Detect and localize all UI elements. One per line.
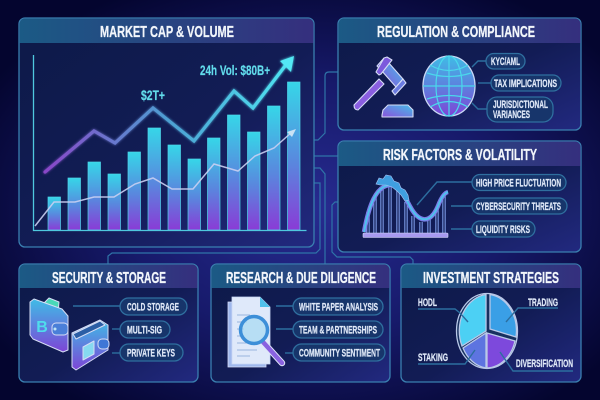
heading: security: SECURITY & STORAGE: [52, 270, 166, 287]
callout: team and partnerships: TEAM & PARTNERSHIPS: [299, 324, 377, 336]
callout: white paper analysis: [276, 298, 383, 315]
pie chart: [456, 294, 518, 368]
circuit connector lines: [108, 72, 413, 264]
callout: cold storage: [73, 298, 187, 315]
icon: bitcoin wallet: [30, 298, 68, 352]
bar chart: [48, 82, 300, 230]
panel: market cap and volume: [19, 18, 314, 247]
callout: tax implications: TAX IMPLICATIONS: [494, 78, 557, 90]
callout: liquidity risks: [451, 221, 535, 237]
label: 24h volume: 24h Vol: $80B+: [200, 62, 270, 78]
callout: liquidity risks: LIQUIDITY RISKS: [476, 224, 530, 236]
label: staking: STAKING: [418, 352, 448, 364]
heading: research: RESEARCH & DUE DILIGENCE: [226, 270, 376, 287]
chart axes: [34, 55, 306, 230]
callout: high price fluctuation: [417, 174, 566, 205]
panel: risk factors and volatility: [338, 141, 581, 252]
callout: KYC/AML: KYC/AML: [491, 56, 520, 68]
callout: jurisdictional variances: [472, 97, 553, 122]
callout: private keys: PRIVATE KEYS: [127, 348, 175, 360]
icon: document with magnifier: [228, 297, 282, 367]
callout: multi-sig: [112, 321, 170, 338]
panel: investment strategies: [401, 264, 581, 382]
label: trading: TRADING: [528, 297, 558, 309]
heading: market cap and volume: MARKET CAP & VOLUME: [100, 24, 234, 41]
callout: community sentiment: COMMUNITY SENTIMENT: [299, 348, 380, 360]
label: diversification: [500, 352, 573, 371]
icon: gavel: [354, 57, 413, 117]
label: market cap: $2T+: [141, 87, 165, 103]
callout: jurisdictional variances: VARIANCES: [493, 109, 530, 121]
market cap trend arrow: [45, 56, 294, 172]
icon: globe: [423, 56, 475, 116]
panel: security and storage: [19, 264, 198, 382]
callout: community sentiment: [285, 344, 385, 361]
callout: cold storage: COLD STORAGE: [127, 302, 179, 314]
callout: jurisdictional variances: JURISDICTIONAL: [493, 99, 548, 111]
icon: bitcoin wallet: B: [36, 319, 48, 336]
callout: KYC/AML: [472, 54, 525, 69]
callout: cybersecurity threats: [451, 198, 567, 214]
icon: roller coaster: [363, 175, 448, 238]
panel: research and due diligence: [211, 264, 390, 382]
callout: private keys: [112, 344, 183, 361]
volume trend line: [35, 129, 296, 226]
callout: tax implications: [478, 75, 561, 91]
callout: multi-sig: MULTI-SIG: [127, 324, 162, 336]
panel: regulation and compliance: [338, 18, 581, 130]
label: HODL: HODL: [418, 297, 437, 309]
label: trading: [506, 297, 558, 322]
icon: wallet: [72, 320, 109, 370]
label: HODL: [418, 297, 468, 322]
callout: white paper analysis: WHITE PAPER ANALYSIS: [299, 302, 378, 314]
callout: team and partnerships: [276, 321, 383, 338]
